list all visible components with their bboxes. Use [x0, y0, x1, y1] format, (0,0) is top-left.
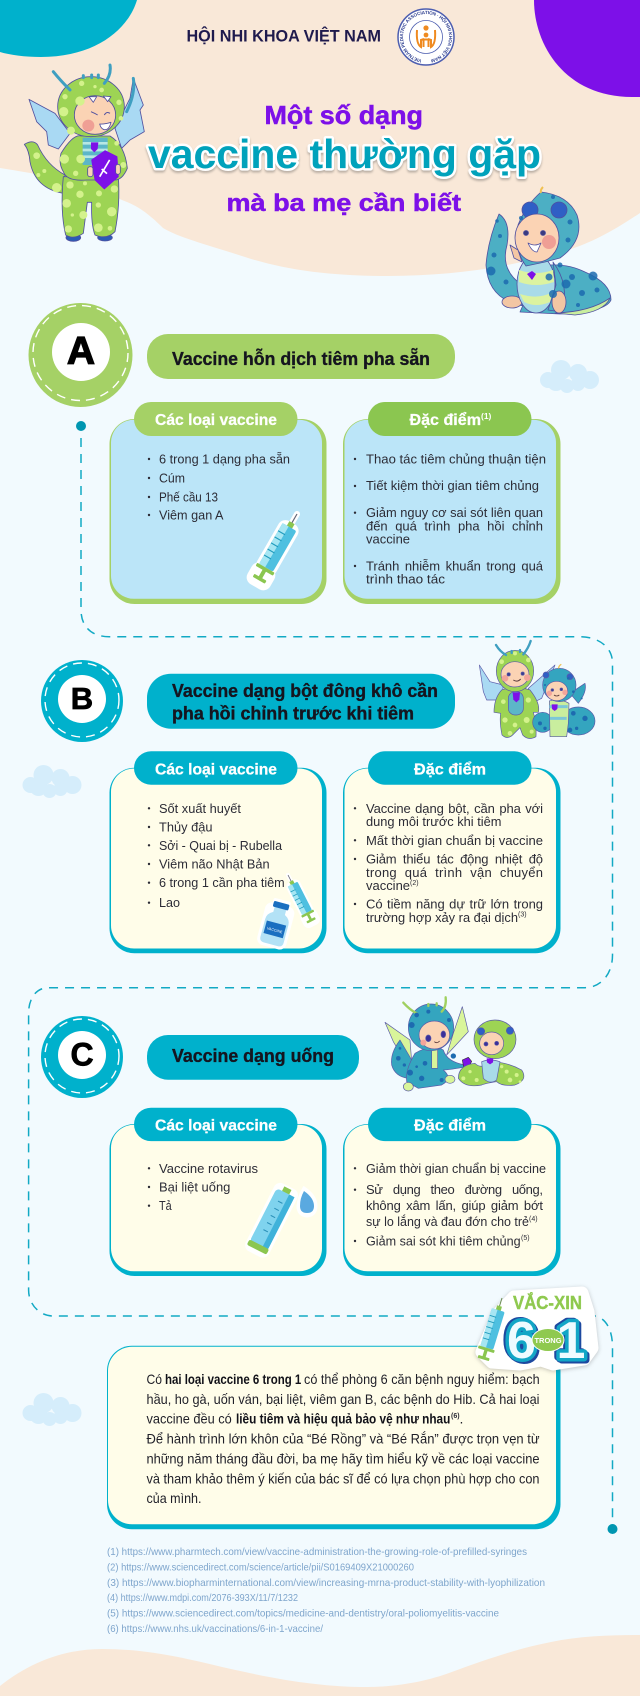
closing note panel: hai loại vaccine 6 trong 1	[165, 1371, 301, 1387]
heading C: Vaccine dạng uống	[172, 1046, 334, 1066]
panel B: characteristics: trường hợp xảy ra đại dịch	[366, 910, 518, 925]
badge B: B	[71, 681, 93, 716]
panel C: characteristics: Giảm sai sót khi tiêm chủng	[366, 1234, 521, 1248]
references: (3) https://www.biopharminternational.com/view/increasing-mrna-product-stability-with-lyophilization	[107, 1577, 545, 1589]
badge A: A	[67, 330, 95, 373]
icon: oral syringe	[243, 1181, 300, 1260]
badge: Vắc-xin 6 trong 1: VẮC-XIN	[513, 1292, 582, 1313]
panel C: types	[110, 1108, 326, 1276]
panel B: types: Sốt xuất huyết	[159, 801, 241, 816]
heading C	[147, 1035, 359, 1080]
closing note panel: những năm tháng đầu đời, ba mẹ hãy tìm hiểu kỹ về các loại vaccine	[146, 1450, 540, 1466]
illustration: green dragon and blue snake babies	[479, 641, 595, 738]
heading A: Vaccine hỗn dịch tiêm pha sẵn	[172, 347, 430, 369]
panel B: types	[110, 751, 326, 953]
heading A	[147, 334, 455, 379]
panel C: types: Tả	[159, 1198, 172, 1213]
panel A: types: Phế cầu 13	[159, 490, 218, 504]
panel A: characteristics: (1)	[481, 411, 492, 421]
illustration: blue snake baby sitting	[486, 187, 611, 315]
panel A: characteristics: Giảm nguy cơ sai sót liên quan	[366, 505, 543, 520]
panel A: types: Các loại vaccine	[155, 412, 277, 429]
panel B: characteristics: Có tiềm năng dự trữ lớn trong	[366, 896, 543, 912]
badge: Vắc-xin 6 trong 1: 6	[507, 1312, 536, 1370]
panel C: characteristics: Giảm thời gian chuẩn bị vaccine	[366, 1161, 546, 1176]
panel B: types: Lao	[159, 895, 180, 910]
badge A	[28, 303, 132, 407]
panel A: characteristics: Tránh nhiễm khuẩn trong quá	[366, 558, 544, 574]
heading B	[147, 674, 455, 729]
panel C: types: Bại liệt uống	[159, 1180, 230, 1194]
panel B: characteristics: Đặc điểm	[414, 760, 486, 778]
references: (4) https://www.mdpi.com/2076-393X/11/7/1232	[107, 1592, 298, 1604]
references: (2) https://www.sciencedirect.com/science/article/pii/S0169409X21000260	[107, 1562, 414, 1574]
panel A: characteristics: đến quá trình pha hồi chỉnh	[366, 518, 543, 534]
badge: Vắc-xin 6 trong 1: 1	[557, 1312, 585, 1370]
panel B: types: Sởi - Quai bị - Rubella	[159, 838, 283, 853]
title: mà ba mẹ cần biết	[226, 190, 461, 217]
badge C: C	[70, 1036, 94, 1072]
references: (1) https://www.pharmtech.com/view/vaccine-administration-the-growing-role-of-prefilled-syringes	[107, 1546, 527, 1558]
panel B: characteristics: vaccine	[366, 878, 410, 893]
title: vaccine thường gặp	[148, 131, 541, 177]
panel A: characteristics: Tiết kiệm thời gian tiêm chủng	[366, 478, 539, 493]
section A	[28, 303, 560, 604]
references: (6) https://www.nhs.uk/vaccinations/6-in-1-vaccine/	[107, 1623, 323, 1635]
panel C: characteristics	[343, 1108, 560, 1276]
closing note panel: Để hành trình lớn khôn của “Bé Rồng” và “Bé Rắn” được trọn vẹn từ	[146, 1431, 540, 1447]
references: (5) https://www.sciencedirect.com/topics/medicine-and-dentistry/oral-poliomyelitis-vaccine	[107, 1608, 499, 1620]
panel A: characteristics: vaccine	[366, 532, 410, 546]
panel C: types: Vaccine rotavirus	[159, 1161, 258, 1176]
logo: Vietnam Pediatric Association: VIETNAM PEDIATRIC ASSOCIATION · HỘI NHI KHOA VIỆT NAM	[400, 10, 452, 63]
title	[148, 100, 541, 217]
background: purple corner blob	[534, 0, 640, 97]
panel C: characteristics: không xâm lấn, giúp giảm bớt	[366, 1198, 543, 1213]
closing note panel: hầu, ho gà, uốn ván, bại liệt, viêm gan B, các bệnh do Hib. Cả hai loại	[146, 1391, 540, 1407]
panel C: types: Các loại vaccine	[155, 1118, 277, 1134]
illustration: green dragon baby holding shield	[24, 65, 144, 241]
closing note panel: .	[460, 1411, 463, 1427]
heading B: Vaccine dạng bột đông khô cần	[172, 681, 438, 701]
panel C: characteristics: (5)	[521, 1235, 530, 1242]
badge: Vắc-xin 6 trong 1: TRONG	[534, 1336, 562, 1345]
panel A: characteristics: Đặc điểm	[410, 411, 481, 429]
panel A: characteristics: Thao tác tiêm chủng thuận tiện	[366, 452, 546, 466]
panel B: types: Các loại vaccine	[155, 761, 277, 778]
panel B: types: 6 trong 1 cần pha tiêm	[159, 875, 285, 890]
badge C	[41, 1016, 123, 1098]
closing note panel: vaccine đều có	[146, 1411, 232, 1427]
closing note panel: Có	[146, 1371, 162, 1387]
panel A: characteristics: trình thao tác	[366, 572, 446, 586]
closing note panel: của mình.	[146, 1490, 202, 1506]
badge B	[41, 660, 123, 742]
cloud 2	[22, 765, 82, 798]
panel B: characteristics: dung môi trước khi tiêm	[366, 814, 502, 829]
panel B: characteristics: (3)	[518, 912, 527, 918]
panel A: types: 6 trong 1 dạng pha sẵn	[159, 452, 290, 466]
illustration: blue dragon and green snake babies	[385, 997, 524, 1091]
closing note panel: có thể phòng 6 căn bệnh nguy hiểm: bạch	[304, 1371, 540, 1387]
section B	[41, 660, 560, 953]
header organisation name: HỘI NHI KHOA VIỆT NAM	[186, 26, 381, 46]
closing note panel: (6)	[451, 1413, 460, 1420]
icon: syringe	[244, 505, 310, 593]
panel B: characteristics: Vaccine dạng bột, cần pha với	[366, 801, 543, 816]
panel A: types: Cúm	[159, 470, 185, 486]
panel B: characteristics	[343, 751, 560, 953]
badge: Vắc-xin 6 trong 1	[475, 1292, 592, 1370]
closing note panel	[107, 1346, 560, 1529]
panel B: characteristics: trong quá trình vận chuyển	[366, 865, 543, 880]
panel C: characteristics: sự lo lắng và đau đớn cho trẻ	[366, 1214, 529, 1229]
panel B: characteristics: Giảm thiểu tác động nhiệt độ	[366, 852, 543, 866]
panel B: characteristics: Mất thời gian chuẩn bị vaccine	[366, 833, 543, 848]
icon: vaccine vial: VACCINE	[266, 926, 283, 934]
panel C: characteristics: Đặc điểm	[414, 1116, 486, 1134]
title: Một số dạng	[264, 100, 423, 130]
icon: vaccine vial	[256, 896, 297, 951]
section C	[41, 1016, 560, 1276]
closing note panel: và tham khảo thêm ý kiến của bác sĩ để có lựa chọn phù hợp cho con	[146, 1470, 540, 1486]
icon: syringe	[279, 869, 322, 930]
background: teal corner blob	[0, 0, 137, 57]
cloud 3	[22, 1393, 82, 1426]
background: beige bottom wave	[0, 1635, 640, 1696]
dashed connector path	[29, 421, 618, 1534]
closing note panel: liều tiêm và hiệu quả bảo vệ như nhau	[236, 1411, 450, 1427]
references	[107, 1546, 545, 1635]
icon: syringe	[475, 1296, 510, 1362]
panel B: characteristics: (2)	[410, 880, 419, 887]
panel C: characteristics: Sử dụng theo đường uống,	[366, 1182, 543, 1197]
panel A: types	[110, 402, 326, 604]
panel A: characteristics	[343, 402, 560, 604]
panel A: types: Viêm gan A	[159, 508, 224, 522]
icon: droplet	[298, 1188, 316, 1216]
heading B: pha hồi chỉnh trước khi tiêm	[172, 704, 414, 724]
background: beige top wave	[0, 0, 640, 276]
panel B: types: Viêm não Nhật Bản	[159, 856, 270, 872]
cloud 1	[540, 360, 599, 393]
panel C: characteristics: (4)	[529, 1216, 538, 1223]
panel B: types: Thủy đậu	[159, 820, 212, 834]
